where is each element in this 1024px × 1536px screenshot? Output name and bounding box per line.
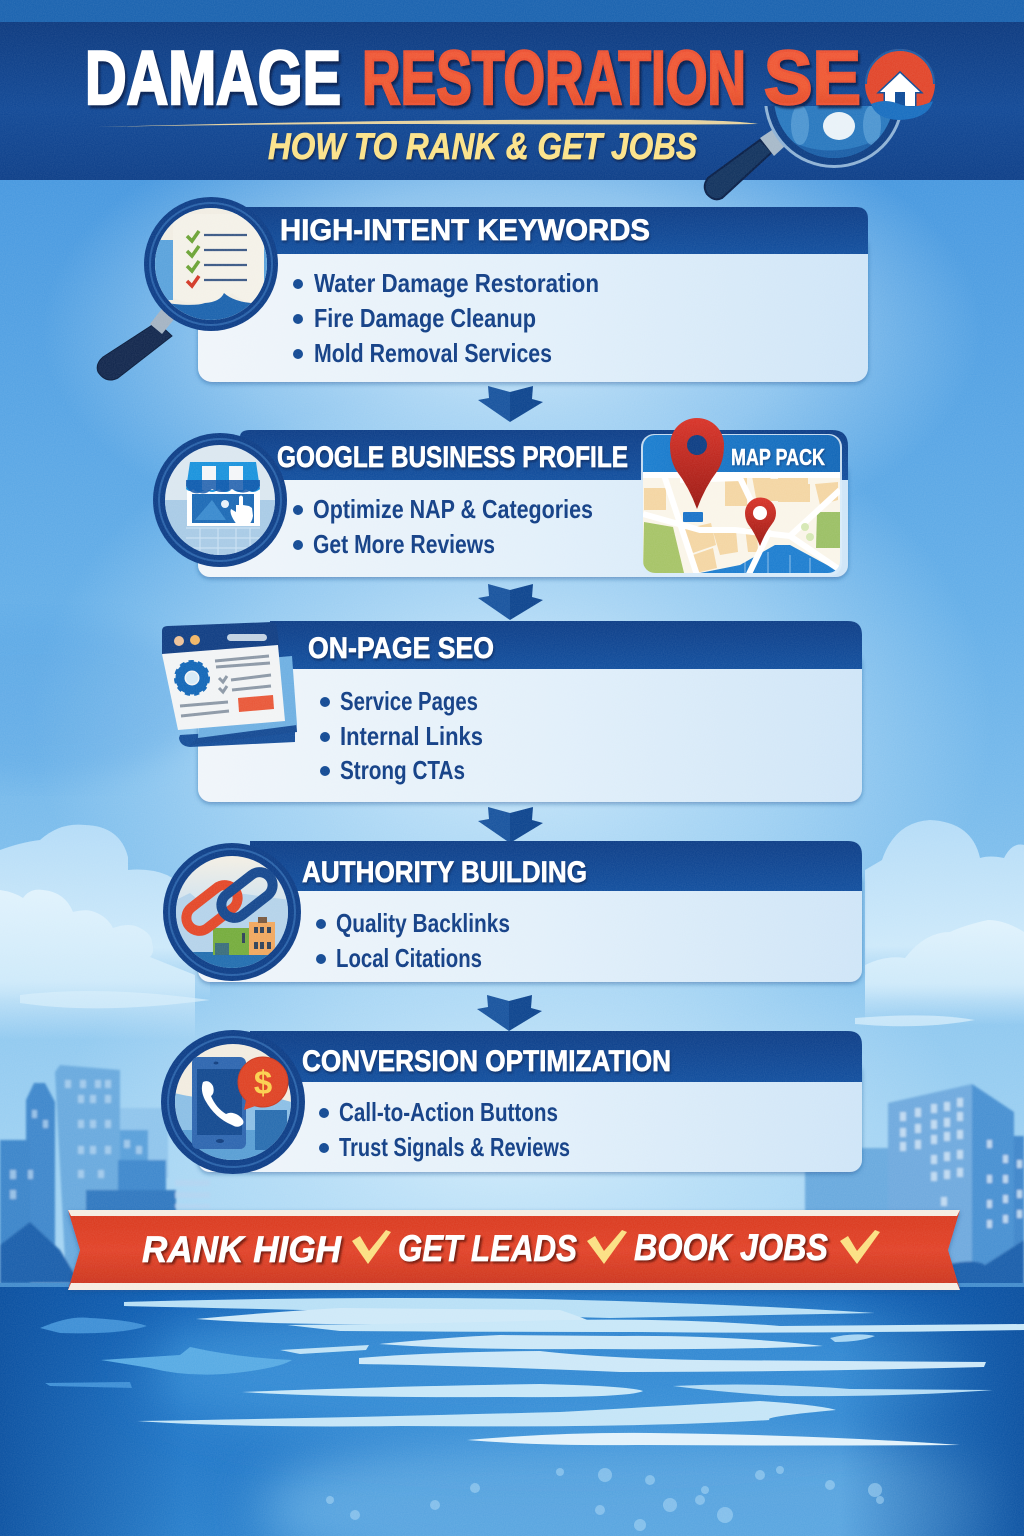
icon: phone and dollar bubble: $ <box>254 1064 272 1101</box>
panel: authority building <box>163 841 862 982</box>
icon: big map pin <box>670 418 724 509</box>
cta ribbon: BOOK JOBS <box>634 1227 828 1268</box>
bullet list: Call-to-Action Buttons <box>339 1097 558 1127</box>
panel: conversion optimization <box>161 1030 862 1174</box>
icon: phone and dollar bubble <box>161 1030 305 1174</box>
heading: HIGH-INTENT KEYWORDS <box>280 214 650 247</box>
title banner <box>0 0 1024 199</box>
icon: magnifier with checklist <box>97 197 278 380</box>
bullet list: Water Damage Restoration <box>314 268 599 298</box>
decorative magnifier behind title <box>704 106 900 200</box>
bullet list <box>293 268 599 368</box>
clouds left <box>0 825 210 1040</box>
icon: check <box>587 1230 627 1264</box>
panel: on-page seo <box>162 621 862 802</box>
arrow 4 <box>477 995 542 1031</box>
subtitle: HOW TO RANK & GET JOBS <box>268 126 697 167</box>
icon: chain link and buildings <box>163 843 301 981</box>
bullet list: Local Citations <box>336 943 482 973</box>
bullet list: Get More Reviews <box>313 529 495 559</box>
title text: RESTORATION <box>362 36 746 121</box>
heading: ON-PAGE SEO <box>308 632 494 665</box>
map pack card <box>641 418 842 576</box>
icon: storefront <box>153 433 287 567</box>
bullet list: Fire Damage Cleanup <box>314 303 536 333</box>
icon: check <box>840 1230 880 1264</box>
water speckles <box>326 1466 884 1531</box>
water streaks <box>40 1298 1024 1446</box>
cta ribbon: GET LEADS <box>398 1228 577 1269</box>
icon: check <box>352 1230 391 1264</box>
bullet list: Internal Links <box>340 721 483 751</box>
icon: house in O <box>865 49 935 120</box>
title text <box>85 36 861 121</box>
bullet list: Mold Removal Services <box>314 338 552 368</box>
map pack label: MAP PACK <box>731 444 825 470</box>
heading: AUTHORITY BUILDING <box>302 856 587 889</box>
bullet list: Service Pages <box>340 686 478 716</box>
bullet list <box>319 1097 570 1162</box>
bullet list <box>316 908 510 973</box>
cta ribbon <box>68 1210 960 1290</box>
map blocks <box>644 476 838 573</box>
skyline left <box>0 1065 210 1285</box>
bullet list: Optimize NAP & Categories <box>313 494 593 524</box>
arrow 2 <box>478 584 543 620</box>
clouds right <box>855 820 1024 1026</box>
gold swoosh <box>97 120 758 127</box>
arrow 1 <box>478 386 543 422</box>
icon: browser window <box>162 622 297 747</box>
title text: DAMAGE <box>85 36 341 121</box>
skyline right <box>805 1084 1024 1286</box>
arrow 3 <box>478 807 543 843</box>
bullet list: Strong CTAs <box>340 755 465 785</box>
bullet list: Trust Signals & Reviews <box>339 1132 570 1162</box>
bullet list <box>293 494 593 559</box>
panel: google business profile <box>153 418 848 577</box>
bullet list: Quality Backlinks <box>336 908 510 938</box>
water <box>0 1283 1024 1536</box>
heading: CONVERSION OPTIMIZATION <box>302 1045 671 1078</box>
panel: high-intent keywords <box>97 197 868 382</box>
ribbon text: RANK HIGH <box>142 1229 342 1270</box>
title text: SE <box>764 36 861 121</box>
heading: GOOGLE BUSINESS PROFILE <box>277 441 628 474</box>
bullet list <box>320 686 483 785</box>
icon: small map pin <box>745 498 776 546</box>
